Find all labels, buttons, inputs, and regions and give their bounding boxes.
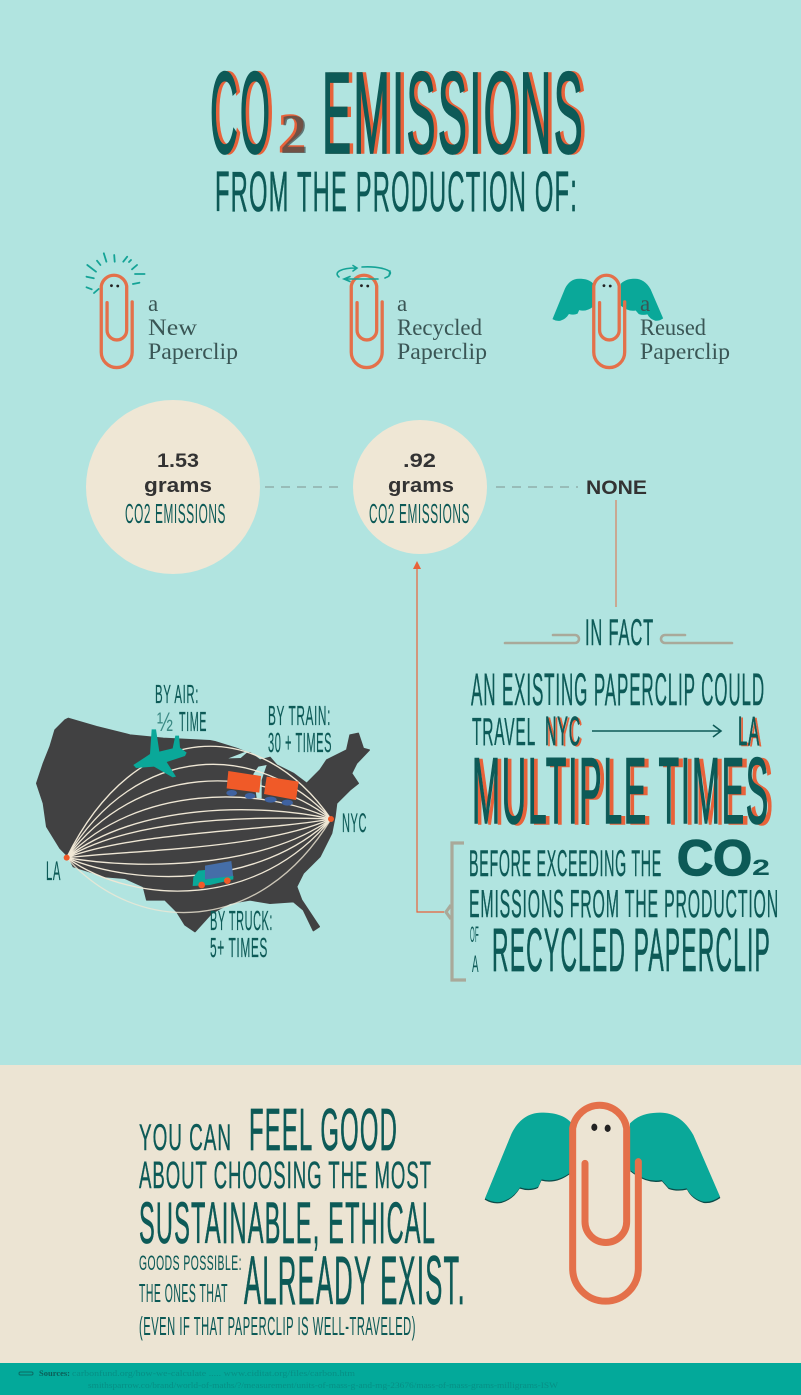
circle: recycled paperclip emissions: .92 xyxy=(403,451,436,472)
icon: truck xyxy=(193,861,233,888)
label: a reused paperclip: a xyxy=(640,291,650,316)
title: CO2 emissions: 2 xyxy=(278,103,306,165)
label: by air xyxy=(155,679,207,737)
text: sources label: Sources: xyxy=(39,1369,70,1378)
label: a recycled paperclip: Recycled xyxy=(397,315,482,340)
circle: recycled paperclip emissions: grams xyxy=(388,475,454,497)
text: an existing paperclip could travel: NYC xyxy=(547,709,583,755)
icon: plane xyxy=(133,729,187,777)
label: a reused paperclip xyxy=(640,291,730,364)
label: a reused paperclip: Paperclip xyxy=(640,339,730,364)
icon: recycled paperclip with arrows xyxy=(337,266,390,368)
label: a new paperclip: New xyxy=(148,315,197,340)
footer: sources xyxy=(0,1363,801,1395)
text: CO2 EMISSIONS xyxy=(369,498,470,529)
icon: train xyxy=(226,771,299,806)
text: BY TRUCK: xyxy=(210,905,273,936)
text: of a recycled paperclip: A xyxy=(472,951,479,978)
label: a new paperclip: Paperclip xyxy=(148,339,238,364)
icon: NYC marker xyxy=(328,816,334,822)
label: a recycled paperclip: Paperclip xyxy=(397,339,487,364)
text: LA xyxy=(738,708,760,754)
label: a recycled paperclip xyxy=(397,291,487,364)
text: 30 + TIMES xyxy=(268,727,332,758)
text: BY TRAIN: xyxy=(268,700,331,731)
label: a recycled paperclip: a xyxy=(397,291,407,316)
text: LA xyxy=(740,709,762,755)
panel: feel good xyxy=(0,1065,801,1363)
text: TIME xyxy=(179,706,207,737)
text: source urls xyxy=(72,1369,559,1390)
heading: in fact xyxy=(505,612,732,653)
text: before exceeding the CO2 emissions: CO xyxy=(677,830,752,886)
title: CO2 emissions: CO xyxy=(210,48,272,178)
text: source urls: smithsparrow.co/brand/world-of-maths/?/measurement/units-of-mass-g-and-mg-23676/mass-of-mass-grams-milligrams-ISW xyxy=(88,1381,559,1390)
text: of a recycled paperclip: OF xyxy=(470,922,479,947)
circle: new paperclip emissions: grams xyxy=(144,475,212,497)
title: CO2 emissions xyxy=(210,48,588,178)
circle: new paperclip emissions: 1.53 xyxy=(157,451,199,472)
text: before exceeding the CO2 emissions: 2 xyxy=(752,855,770,880)
icon: footer paperclip xyxy=(19,1372,33,1375)
text: before exceeding the CO2 emissions xyxy=(469,830,779,926)
text: feel good message: FEEL GOOD xyxy=(249,1097,398,1163)
text: feel good message: ABOUT CHOOSING THE MOST xyxy=(139,1155,432,1197)
connector: none to in fact xyxy=(615,500,617,607)
title: CO2 emissions: CO xyxy=(214,48,276,178)
circle: new paperclip emissions xyxy=(86,400,260,574)
text: LA xyxy=(46,856,61,886)
map: USA with routes xyxy=(37,718,369,932)
label: by air: BY AIR: xyxy=(155,679,199,709)
label: by train xyxy=(268,700,332,758)
text: feel good message: YOU CAN xyxy=(139,1117,232,1158)
text: an existing paperclip could travel xyxy=(471,664,765,755)
label: by truck xyxy=(210,905,273,963)
text: feel good message: GOODS POSSIBLE: xyxy=(139,1252,242,1275)
map: outline xyxy=(37,718,369,932)
label: a new paperclip: a xyxy=(148,291,158,316)
bracket xyxy=(446,843,466,980)
text: an existing paperclip could travel: NYC xyxy=(545,708,581,754)
text: feel good message: (EVEN IF THAT PAPERCLIP IS WELL-TRAVELED) xyxy=(139,1311,416,1341)
text: NYC xyxy=(342,808,367,838)
text: feel good message: THE ONES THAT xyxy=(139,1278,228,1308)
title: CO2 emissions: 2 xyxy=(280,104,308,166)
label: by air: ½ xyxy=(157,707,173,737)
label: none: NONE xyxy=(586,478,647,499)
arrow: from bracket to recycled circle xyxy=(413,561,444,912)
label: a new paperclip xyxy=(148,291,238,364)
icon: reused paperclip with wings xyxy=(552,275,663,368)
text: 5+ TIMES xyxy=(210,932,268,963)
heading: in fact: IN FACT xyxy=(585,612,654,653)
icon: new paperclip with sparkle rays xyxy=(86,253,145,368)
map: routes xyxy=(67,746,331,913)
text: feel good message xyxy=(139,1097,466,1341)
text: an existing paperclip could travel: TRAVEL xyxy=(472,711,536,754)
icon: LA marker xyxy=(64,855,70,861)
circle: recycled paperclip emissions xyxy=(353,420,487,554)
text: source urls: carbonfund.org/how-we-calculate ..... www.ciditat.org/files/carbon.htm xyxy=(72,1369,356,1378)
icon: winged paperclip xyxy=(485,1105,720,1301)
label: a reused paperclip: Reused xyxy=(640,315,706,340)
circle: new paperclip emissions: CO2 EMISSIONS xyxy=(125,498,226,529)
